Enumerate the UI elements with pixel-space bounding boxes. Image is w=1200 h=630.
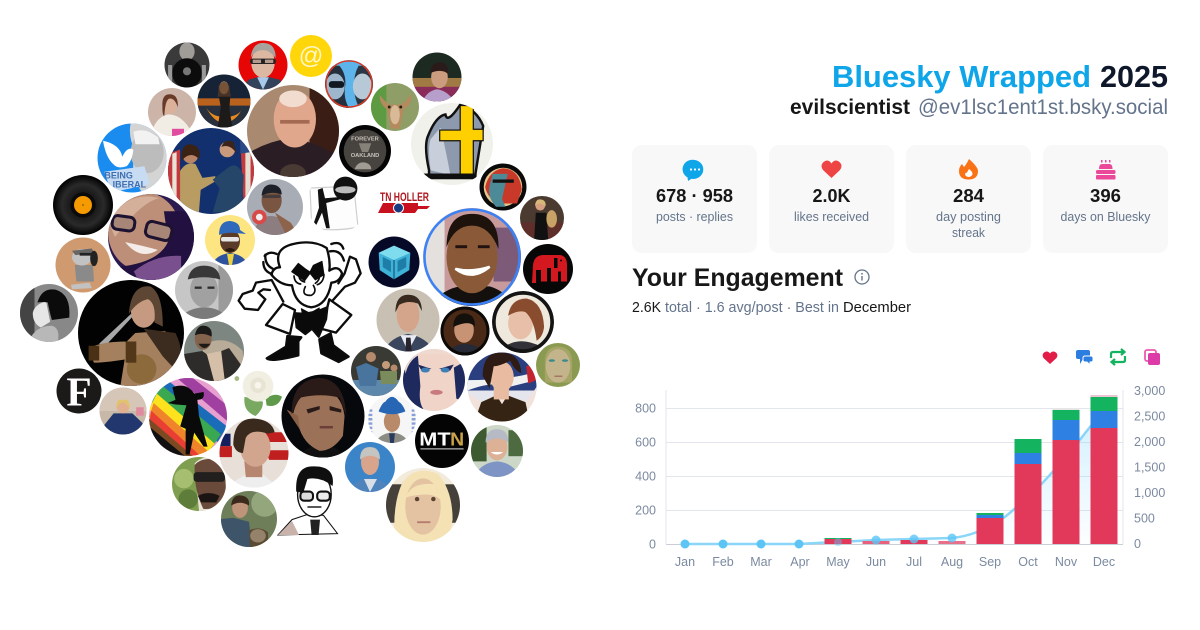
- month labels: Oct: [1018, 555, 1038, 569]
- right axis labels: 1,500: [1134, 460, 1165, 474]
- avatar: man with party hat: [368, 395, 416, 443]
- illustration: evil scientist cartoon: [239, 242, 361, 362]
- icon: reposts legend: [1111, 349, 1125, 365]
- right axis labels: 3,000: [1134, 384, 1165, 398]
- icon: heart: [822, 160, 842, 178]
- account name and handle: [790, 96, 1168, 119]
- icon: replies legend: [1076, 350, 1093, 365]
- avatar: being liberal: [98, 124, 166, 192]
- avatar: white rose: [234, 371, 282, 416]
- avatar: yellow at sign: [290, 35, 332, 77]
- panel: likes received: likes received: [794, 209, 869, 224]
- month labels: Jul: [906, 555, 922, 569]
- avatar: forever oakland: FOREVER: [351, 137, 380, 143]
- month labels: Feb: [712, 555, 734, 569]
- title: Bluesky Wrapped: [832, 59, 1091, 94]
- avatar: men in group: [351, 346, 401, 396]
- avatar: man on red background: [238, 40, 288, 90]
- logo: TN Holler: TN HOLLER: [380, 192, 430, 204]
- avatar: sunglasses man: [172, 457, 226, 511]
- right arm and raised hand: [332, 257, 361, 302]
- avatar: man in grey cap: [175, 261, 233, 319]
- panel: days on Bluesky: days on Bluesky: [1060, 209, 1151, 224]
- month labels: Dec: [1093, 555, 1115, 569]
- month labels: Mar: [750, 555, 772, 569]
- avatar: vinyl record: [53, 175, 113, 235]
- chart legend: [1043, 349, 1160, 365]
- icon: info: [855, 270, 869, 284]
- icon: flame: [959, 159, 978, 180]
- engagement summary: December: [843, 300, 911, 316]
- avatar: woman with red-brown hair and black ring: [492, 291, 554, 353]
- avatar: rainbow silhouette: [149, 374, 227, 456]
- month labels: Sep: [979, 555, 1001, 569]
- avatar: being liberal: IBERAL: [113, 180, 147, 190]
- avatar: MTN logo: N: [450, 429, 464, 450]
- engagement summary: 2.6K: [632, 300, 661, 316]
- panel: day posting streak: streak: [952, 225, 985, 240]
- icon: speech bubble: [683, 160, 703, 181]
- left arm and open hand: [239, 280, 283, 310]
- engagement summary: total · 1.6 avg/post · Best in: [665, 300, 839, 316]
- avatar: zombie walker logo: [310, 176, 358, 230]
- left jacket: [266, 304, 295, 334]
- avatar: blonde woman: [386, 468, 460, 542]
- avatar: snoopy spy: [56, 238, 110, 292]
- hair tufts: [263, 243, 344, 274]
- panel: posts and replies: [632, 145, 757, 253]
- gridlines: [666, 390, 1123, 544]
- avatar: young man at night: [412, 52, 462, 102]
- avatar: spock: [282, 374, 364, 458]
- avatar: red elephant: [523, 244, 573, 294]
- left axis labels: 0: [649, 538, 656, 552]
- right axis labels: 2,000: [1134, 435, 1165, 449]
- avatar: bearded man reclining: [184, 321, 244, 381]
- avatar: warrior woman: [78, 280, 184, 386]
- stacked bars: [824, 395, 1118, 544]
- right axis labels: 1,000: [1134, 486, 1165, 500]
- avatar: laughing man with glasses: [108, 192, 194, 280]
- avatar: MTN logo: [415, 414, 469, 468]
- avatar: woman in fire: [198, 74, 250, 128]
- avatar: blue-eyed woman: [403, 349, 465, 411]
- panel: posts and replies: 678 · 958: [656, 185, 733, 206]
- avatar: man on blue: [345, 442, 395, 492]
- panel: days on Bluesky: 396: [1090, 185, 1121, 206]
- panel: day posting streak: 284: [953, 185, 985, 206]
- cumulative area and line: [685, 411, 1104, 544]
- panel: days on Bluesky: [1043, 145, 1168, 253]
- heading: your engagement: Your Engagement: [632, 264, 844, 292]
- month labels: [675, 555, 1115, 569]
- panel: day posting streak: [906, 145, 1031, 253]
- avatar: MTN logo: MT: [419, 429, 451, 450]
- left axis labels: [635, 402, 656, 552]
- month labels: Apr: [790, 555, 810, 569]
- panel: likes received: 2.0K: [812, 185, 851, 206]
- avatar: F logo: [56, 368, 102, 414]
- right axis labels: 500: [1134, 512, 1155, 526]
- panel: posts and replies: posts · replies: [656, 209, 733, 224]
- avatar: deer: [371, 83, 419, 131]
- month labels: Jan: [675, 555, 695, 569]
- icon: quotes legend: [1145, 350, 1160, 365]
- avatar: young man with flag: [220, 418, 288, 488]
- avatar: man with headphones: [247, 179, 303, 235]
- panel: likes received: [769, 145, 894, 253]
- account name and handle: @ev1lsc1ent1st.bsky.social: [918, 96, 1168, 119]
- engagement chart: [635, 384, 1165, 569]
- avatar: man in suit: [376, 288, 440, 352]
- avatar: man with record: [164, 42, 210, 88]
- left axis labels: 200: [635, 504, 656, 518]
- icon: likes legend: [1043, 351, 1057, 364]
- avatar: woman with flag: [468, 352, 536, 422]
- avatar: smiling older man in check shirt: [471, 425, 523, 477]
- month labels: Jun: [866, 555, 886, 569]
- left axis labels: 800: [635, 402, 656, 416]
- avatar: silent film woman: [20, 284, 78, 342]
- month labels: Nov: [1055, 555, 1078, 569]
- avatar: man with dog: [221, 490, 278, 547]
- panel: day posting streak: day posting: [936, 209, 1001, 224]
- month labels: Aug: [941, 555, 963, 569]
- avatar: man on dark brown: [440, 306, 490, 356]
- right axis labels: 2,500: [1134, 410, 1165, 424]
- avatar: sketched man with glasses: [278, 466, 338, 535]
- right leg and shoe: [319, 333, 349, 362]
- bow tie: [301, 308, 319, 318]
- avatar bubble cluster: [20, 35, 580, 547]
- eyes and nose: [294, 274, 324, 295]
- avatar: being liberal: BEING: [104, 171, 133, 181]
- avatar: woman in white: [148, 88, 196, 136]
- right jacket: [321, 299, 351, 333]
- angry eyebrows: [292, 261, 324, 281]
- line markers: [680, 534, 956, 548]
- left axis labels: 400: [635, 470, 656, 484]
- avatar: forever oakland: OAKLAND: [351, 153, 379, 159]
- avatar: red and blue poster face: [480, 164, 526, 210]
- month labels: May: [826, 555, 851, 569]
- avatar: two men profile: [325, 60, 373, 108]
- black vest: [295, 307, 327, 337]
- avatar: glowing cube: [368, 236, 420, 288]
- left axis labels: 600: [635, 436, 656, 450]
- avatar: woman with stuffed dog: [520, 196, 564, 240]
- left leg and shoe: [267, 336, 301, 360]
- avatar: bald man: [247, 85, 339, 183]
- avatar: cartoon man in cap: [205, 215, 255, 265]
- title: 2025: [1100, 59, 1168, 94]
- right axis labels: [1134, 384, 1165, 551]
- avatar: forever oakland: [339, 125, 391, 177]
- account name and handle: evilscientist: [790, 96, 910, 119]
- right axis labels: 0: [1134, 537, 1141, 551]
- avatar: green tinted woman: [536, 343, 580, 387]
- avatar: woman in blue dress: [100, 388, 146, 434]
- domed head: [271, 242, 342, 307]
- engagement summary: [632, 300, 911, 316]
- avatar: yellow at sign: @: [299, 43, 323, 70]
- avatar: F logo: F: [66, 368, 92, 414]
- logo: TN Holler: [378, 192, 430, 213]
- avatar: mitre hat: [411, 103, 493, 185]
- avatar: smiling man highlighted: [423, 208, 521, 306]
- icon: birthday cake: [1096, 160, 1116, 180]
- avatar: two people shaking hands: [168, 128, 254, 214]
